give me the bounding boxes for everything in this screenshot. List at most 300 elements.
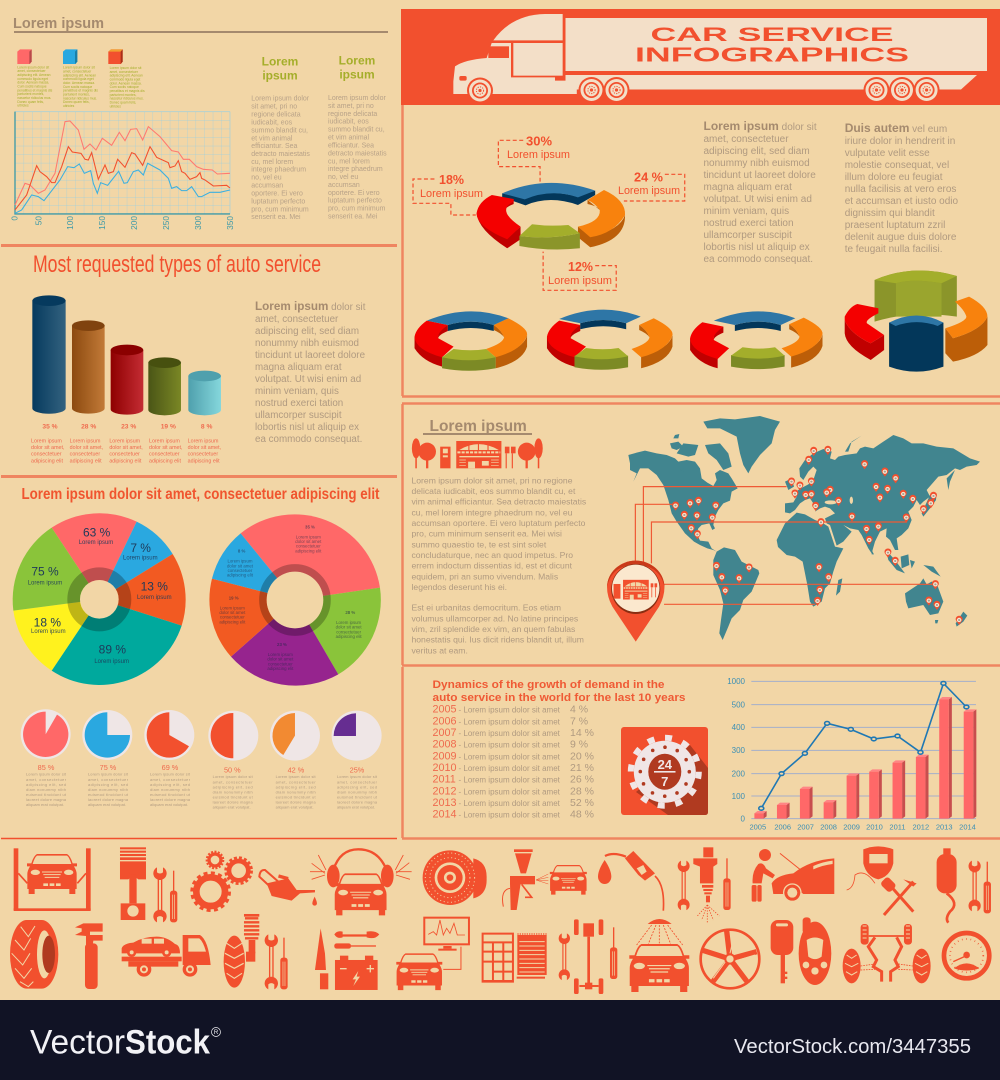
pie chart 2: Lorem ipsum <box>227 559 252 564</box>
text block 2: delenit augue duis dolore <box>845 232 957 243</box>
legend: commodo ligula eget <box>110 77 140 81</box>
line chart: 100 <box>65 216 75 230</box>
legend: parturient montes, <box>63 92 90 96</box>
small percentage pies <box>21 709 382 809</box>
small percentage pies: euismod tincidunt ut <box>150 793 191 797</box>
exploded pillar chart <box>845 271 987 372</box>
text block 2: illum dolore eu feugiat <box>845 172 943 183</box>
pie chart 2: adipiscing elit <box>336 634 362 639</box>
big location marker <box>607 561 664 642</box>
text block 2: Duis autem vel eum <box>845 121 947 135</box>
year list: - Lorem ipsum dolor sit amet <box>458 799 561 808</box>
pie chart 2: 28 % <box>345 610 355 615</box>
small percentage pies: aliquam erat volutpat. <box>88 803 126 807</box>
small percentage pies: Lorem ipsum dolor sit <box>88 773 129 777</box>
icon: tire <box>10 920 58 989</box>
text block 2: vulputate velit esse <box>845 148 930 159</box>
text block 1: lobortis nisl ut aliquip ex <box>704 242 810 253</box>
year list: 2006 <box>432 715 457 727</box>
bar and line chart: 2005 <box>749 823 766 832</box>
year list: 48 % <box>570 809 594 821</box>
line chart: 150 <box>97 216 107 230</box>
pie chart 1: 18 % <box>34 616 61 630</box>
text columns: et vim animal <box>251 135 293 142</box>
body text: Lorem ipsum dolor sit <box>255 300 365 313</box>
body text: amet, consectetuer <box>255 314 339 325</box>
text columns: summo blandit cu, <box>328 127 385 134</box>
icon: fuel nozzle <box>598 851 664 911</box>
cylinder bar chart: dolor sit amet, <box>70 445 103 451</box>
body text: ullamcorper suscipit <box>255 410 342 421</box>
bar and line chart: 2014 <box>959 823 976 832</box>
cylinder bar chart: consectetuer <box>188 452 218 458</box>
small percentage pies: 50 % <box>224 765 241 774</box>
legend: penatibus et magnis dis <box>110 89 145 93</box>
icon: car wash <box>629 919 689 992</box>
line chart: 300 <box>193 216 203 230</box>
year list: - Lorem ipsum dolor sit amet <box>458 787 561 796</box>
cylinder bar chart: Lorem ipsum <box>149 438 180 444</box>
year list: 20 % <box>570 750 594 762</box>
callouts: Lorem ipsum <box>507 149 570 161</box>
cylinder bar chart: adipiscing elit <box>70 458 102 464</box>
legend: Cum sociis natoque <box>17 84 47 88</box>
text block 1: Lorem ipsum dolor sit <box>704 119 817 133</box>
body text: tincidunt ut laoreet dolore <box>255 350 366 361</box>
text block 1: ea commodo consequat. <box>704 254 813 265</box>
icon: car key and alarm fob <box>771 917 831 985</box>
pie chart 1: Lorem ipsum <box>31 629 66 635</box>
legend: Lorem ipsum dolor sit <box>17 65 49 69</box>
icon: oil can <box>259 870 317 906</box>
panel: donut charts <box>413 119 987 372</box>
pie chart 2: Lorem ipsum <box>296 534 321 539</box>
cylinder bar chart: Lorem ipsum <box>109 438 140 444</box>
icon: tow truck <box>122 935 211 977</box>
bar and line chart: 2011 <box>889 823 906 832</box>
bar and line chart: 2007 <box>797 823 814 832</box>
pie chart 2: 19 % <box>229 595 239 600</box>
heading: Lorem ipsum dolor sit amet, consectetuer adipiscing elit <box>22 486 380 503</box>
small percentage pies: adipiscing elit, sed <box>337 785 377 789</box>
small percentage pies: amet, consectetuer <box>276 780 316 784</box>
text columns: iudicabit, eos <box>328 119 369 126</box>
text columns: senserit ea. Mei <box>328 213 378 220</box>
body text: equidem, pri an sumo vivendum. Malis <box>412 571 558 581</box>
small percentage pies: amet, consectetuer <box>26 778 67 782</box>
pie chart 2: adipiscing elit <box>267 666 294 671</box>
small percentage pies: Lorem ipsum dolor sit <box>276 775 317 779</box>
small percentage pies: adipiscing elit, sed <box>26 783 66 787</box>
small percentage pies: aliquam erat volutpat. <box>213 805 251 809</box>
cylinder bar chart: consectetuer <box>31 452 62 458</box>
legend: ultricies <box>110 104 121 108</box>
legend: Lorem ipsum dolor sit <box>110 66 141 70</box>
body text: lobortis nisl ut aliquip ex <box>255 422 359 433</box>
icon: welding mask and hammers <box>847 846 917 915</box>
pie chart 2: consectetuer <box>220 615 245 620</box>
body text: vim animal efficiantur. Sea detracto maiestatis <box>412 497 586 507</box>
cylinder bar chart: consectetuer <box>70 452 100 458</box>
small percentage pies: 69 % <box>162 763 179 772</box>
text columns: efficiantur. Sea <box>251 143 298 150</box>
text columns: cu, mel lorem <box>251 159 293 166</box>
legend: commodo ligula eget <box>63 77 94 81</box>
small percentage pies: Lorem ipsum dolor sit <box>26 773 67 777</box>
callouts: 24 % <box>634 170 663 184</box>
year list: 28 % <box>570 785 594 797</box>
pie chart 2: Lorem ipsum <box>336 620 361 625</box>
small percentage pies: 42 % <box>288 765 305 774</box>
year list: - Lorem ipsum dolor sit amet <box>458 764 561 773</box>
cylinder bar chart: 28 % <box>81 424 96 431</box>
text block 1: nonummy nibh euismod <box>704 158 810 169</box>
donut variant 3 <box>690 311 823 369</box>
text columns: ipsum <box>262 68 298 82</box>
cylinder bar chart: 35 % <box>42 424 58 431</box>
body text: pro, cum minimum senserit ea. Mei wisi <box>412 529 562 539</box>
legend: Cum sociis natoque <box>63 85 92 89</box>
cylinder bar chart: Lorem ipsum <box>188 438 218 444</box>
small percentage pies: Lorem ipsum dolor sit <box>213 775 254 779</box>
pie chart 2: consectetuer <box>336 629 362 634</box>
small percentage pies: 75 % <box>100 763 117 772</box>
text columns: integre phaedrum <box>251 167 306 174</box>
year list: 9 % <box>570 739 588 751</box>
year list: 14 % <box>570 727 594 739</box>
icon: speedometer <box>944 933 989 978</box>
icon: gears <box>192 852 252 910</box>
legend: parturient montes, <box>17 92 44 96</box>
small percentage pies: euismod tincidunt ut <box>213 795 254 799</box>
legend: amet, consectetuer <box>17 69 47 73</box>
legend: adipiscing elit. Aenean <box>17 73 51 77</box>
donut variant 1 <box>415 311 527 371</box>
callouts: 30% <box>526 134 552 148</box>
year list: 2013 <box>432 797 457 809</box>
text columns: pro, cum minimum <box>328 206 386 213</box>
body text: delicata iudicabit, eos summo blandit cu, et <box>412 486 576 496</box>
pie chart 1 <box>13 513 186 685</box>
year list: - Lorem ipsum dolor sit amet <box>458 729 561 738</box>
heading <box>432 679 686 704</box>
small percentage pies: 85 % <box>38 763 55 772</box>
icon: clamp and battery <box>315 928 379 990</box>
body text: Lorem ipsum dolor sit amet, pri no regione <box>412 475 572 485</box>
brand logo: Stock <box>125 1024 210 1062</box>
text block 2: molestie consequat, vel <box>845 160 949 171</box>
icon: 24/7 gear badge: 7 <box>661 774 668 789</box>
world map <box>628 416 980 640</box>
icon: fuel injector with tools <box>678 847 731 923</box>
body text: nonummy nibh euismod <box>255 338 359 349</box>
small percentage pies: laoreet dolore magna <box>276 800 316 804</box>
text columns: efficiantur. Sea <box>328 142 374 149</box>
pie chart 2: 8 % <box>238 549 246 554</box>
year list: - Lorem ipsum dolor sit amet <box>458 717 561 726</box>
pie chart 2: dolor sit amet <box>219 610 246 615</box>
legend: ultricies <box>63 104 75 108</box>
watermark footer <box>0 1000 1000 1080</box>
bar and line chart: 2012 <box>912 823 929 832</box>
title: CAR SERVICE <box>650 24 894 46</box>
small donut variants <box>415 271 987 372</box>
icon: shock absorber with tire and tools <box>224 914 288 989</box>
body text: adipiscing elit, sed diam <box>255 326 359 337</box>
year list: 2010 <box>432 762 457 774</box>
small percentage pies: aliquam erat volutpat. <box>276 805 314 809</box>
heading: Lorem ipsum <box>13 16 104 32</box>
text block 1: minim veniam, quis <box>704 206 789 217</box>
cylinder bar chart: 23 % <box>121 424 136 431</box>
donut variant 2 <box>547 310 673 370</box>
line chart: 50 <box>34 216 44 225</box>
body text: volumus ullamcorper ad. No latine principes <box>412 613 578 623</box>
pie chart 2: 35 % <box>305 524 315 529</box>
legend: Donec quam felis, <box>17 100 44 104</box>
legend: penatibus et magnis dis <box>17 88 53 92</box>
image id: VectorStock.com/3447355 <box>734 1036 971 1058</box>
legend: adipiscing elit. Aenean <box>110 74 143 78</box>
text block 1: volutpat. Ut wisi enim ad <box>704 194 812 205</box>
small percentage pies: laoreet dolore magna <box>26 798 67 802</box>
body text: minim veniam, quis <box>255 386 339 397</box>
bar and line chart: 2013 <box>936 823 953 832</box>
icon: notepad <box>517 934 547 979</box>
body text: Est ei urbanitas democritum. Eos etiam <box>412 603 561 613</box>
main donut chart <box>413 140 685 290</box>
text columns: Lorem <box>262 54 298 68</box>
panel: line chart with legend <box>9 16 388 230</box>
body text: magna aliquam erat <box>255 362 342 373</box>
text block 2: nulla facilisis at vero eros <box>845 184 956 195</box>
heading: Dynamics of the growth of demand in the <box>432 679 664 691</box>
year list: - Lorem ipsum dolor sit amet <box>458 776 561 785</box>
small percentage pies: adipiscing elit, sed <box>213 785 253 789</box>
icon: mechanic at car <box>752 849 834 902</box>
text columns: sit amet, pri no <box>251 104 297 111</box>
small percentage pies: amet, consectetuer <box>150 778 191 782</box>
connector lines <box>635 487 934 604</box>
title <box>635 24 909 66</box>
icon: service station with trees <box>412 438 543 468</box>
text columns: oportere. Ei vero <box>251 191 303 198</box>
cylinder bar chart: adipiscing elit <box>188 458 220 464</box>
line chart: 250 <box>161 216 171 230</box>
legend: Lorem ipsum dolor sit <box>63 66 95 70</box>
text block 1: nostrud exerci tation <box>704 218 794 229</box>
legend: parturient montes, <box>110 93 137 97</box>
icon: calculator <box>482 933 514 983</box>
cylinder bar chart: consectetuer <box>109 452 140 458</box>
legend <box>17 49 145 108</box>
text block 2: iriure dolor in hendrerit in <box>845 136 955 147</box>
bar and line chart: 2006 <box>774 823 791 832</box>
body text: summo quaestio te, te est sint solet <box>412 539 547 549</box>
bar and line chart: 400 <box>732 723 746 732</box>
text block 2: dignissim qui blandit <box>845 208 935 219</box>
cylinder bar chart: dolor sit amet, <box>31 445 64 451</box>
pie chart 2: adipiscing elit <box>295 548 322 553</box>
cylinder bar chart: adipiscing elit <box>149 458 181 464</box>
year list: 2005 <box>432 704 457 716</box>
small percentage pies: adipiscing elit, sed <box>150 783 190 787</box>
text columns: summo blandit cu, <box>251 127 308 134</box>
pie chart 1: Lorem ipsum <box>28 581 62 587</box>
line chart: 0 <box>9 216 19 221</box>
text columns: sit amet, pri no <box>328 103 374 110</box>
text columns <box>251 54 387 221</box>
cylinder bar chart: 19 % <box>161 424 176 431</box>
text block 1: magna aliquam erat <box>704 182 792 193</box>
cylinder bar chart: adipiscing elit <box>31 458 64 464</box>
body text: legendos deserunt his ei. <box>412 582 507 592</box>
small percentage pies: aliquam erat volutpat. <box>337 805 375 809</box>
title: INFOGRAPHICS <box>635 44 909 66</box>
callouts: Lorem ipsum <box>420 188 483 200</box>
panel: pie charts <box>13 486 382 809</box>
small percentage pies: diam nonummy nibh <box>26 788 66 792</box>
small percentage pies: diam nonummy nibh <box>88 788 128 792</box>
year list: - Lorem ipsum dolor sit amet <box>458 741 561 750</box>
pie chart 2: dolor sit amet <box>336 625 362 630</box>
pie chart 1: Lorem ipsum <box>123 555 158 561</box>
legend: nascetur ridiculus mus. <box>63 96 97 100</box>
text columns: Lorem <box>339 54 375 68</box>
pie chart 2: 23 % <box>277 642 287 647</box>
text columns: Lorem ipsum dolor <box>328 95 386 102</box>
pie chart 2: Lorem ipsum <box>268 652 293 657</box>
heading: auto service in the world for the last 10 years <box>432 692 686 704</box>
heading: Most requested types of auto service <box>33 251 321 278</box>
text block 2: te feugait nulla facilisi. <box>845 244 943 255</box>
body text: honestatis qui. Ius dicit ridens blandit ut, illum <box>412 635 584 645</box>
continents: Eurasia, Africa and Oceania <box>777 435 980 627</box>
text columns: et vim animal <box>328 135 370 142</box>
body text: errem indoctum dissentias id, est et dicunt <box>412 561 573 571</box>
text columns: luptatum perfecto <box>328 198 382 205</box>
panel: service icons right half <box>502 846 991 994</box>
body text <box>412 475 586 655</box>
pie chart 2: Lorem ipsum <box>220 605 245 610</box>
small percentage pies: amet, consectetuer <box>213 780 253 784</box>
bar and line chart: 300 <box>732 746 746 755</box>
legend: commodo ligula eget <box>17 77 48 81</box>
bar and line chart <box>727 677 976 832</box>
bar and line chart: 500 <box>732 700 746 710</box>
panel: service icons left half <box>10 847 514 990</box>
pie chart 2: dolor sit amet <box>295 539 322 544</box>
small percentage pies: euismod tincidunt ut <box>337 795 378 799</box>
year list: 52 % <box>570 797 594 809</box>
text block 1: adipiscing elit, sed diam <box>704 146 810 157</box>
text columns: ipsum <box>339 68 375 82</box>
small percentage pies: laoreet dolore magna <box>213 800 254 804</box>
line chart: 350 <box>225 216 235 230</box>
text columns: accumsan <box>328 182 360 189</box>
bar and line chart: 0 <box>741 814 746 824</box>
year list <box>432 704 594 821</box>
small percentage pies: amet, consectetuer <box>337 780 378 784</box>
bar and line chart: 2008 <box>820 823 837 832</box>
legend: adipiscing elit. Aenean <box>63 73 96 77</box>
cylinder bar chart: dolor sit amet, <box>149 445 182 451</box>
icon: car with headphones <box>310 849 412 915</box>
body text: concludaturque, nec an quod impetus. Pro <box>412 550 573 560</box>
callouts: 18% <box>439 172 464 187</box>
callouts: Lorem ipsum <box>548 275 612 287</box>
callouts: Lorem ipsum <box>618 185 680 197</box>
text columns: detracto maiestatis <box>328 150 387 157</box>
legend: dolor. Aenean massa. <box>63 81 95 85</box>
bar and line chart: 2009 <box>843 823 860 832</box>
text columns: iudicabit, eos <box>251 119 293 126</box>
legend: Donec quam felis, <box>110 100 136 104</box>
brand logo <box>30 1024 220 1062</box>
brand logo: R <box>214 1030 219 1036</box>
legend: ultricies <box>17 104 29 108</box>
icon: piston with tools <box>120 847 177 922</box>
year list: 2014 <box>432 809 457 821</box>
pie chart 2: adipiscing elit <box>219 619 246 624</box>
heading: Lorem ipsum <box>430 418 527 435</box>
icon: alloy wheel <box>701 930 759 988</box>
icon: 24/7 gear badge: 24 <box>658 757 673 772</box>
small percentage pies: aliquam erat volutpat. <box>26 803 64 807</box>
year list: - Lorem ipsum dolor sit amet <box>458 752 561 761</box>
icon: car lift <box>14 848 91 911</box>
legend: dolor. Aenean massa. <box>17 81 49 85</box>
year list: 2008 <box>432 739 457 751</box>
icon: brake disc <box>423 850 487 905</box>
small percentage pies: laoreet dolore magna <box>150 798 191 802</box>
legend: amet, consectetuer <box>63 69 92 73</box>
text block 1: tincidunt ut laoreet dolore <box>704 170 816 181</box>
year list: 2009 <box>432 750 457 762</box>
cylinder bar chart: Lorem ipsum <box>70 438 100 444</box>
legend: nascetur ridiculus mus. <box>17 96 51 100</box>
text block 2: et accumsan et iusto odio <box>845 196 959 207</box>
small percentage pies: euismod tincidunt ut <box>88 793 129 797</box>
cylinder bar chart: adipiscing elit <box>109 458 142 464</box>
icon: drivetrain and tools <box>559 919 617 994</box>
callouts <box>420 134 680 287</box>
cylinder bar chart: 8 % <box>201 424 212 431</box>
icon: muffler and tools <box>937 848 991 923</box>
text columns: regione delicata <box>328 111 377 118</box>
text columns: no, vel eu <box>328 174 358 181</box>
small percentage pies: 25% <box>350 765 365 774</box>
text columns: cu, mel lorem <box>328 158 370 165</box>
brand logo: Vector <box>30 1024 125 1062</box>
year list: 2007 <box>432 727 457 739</box>
pie chart 2: consectetuer <box>296 544 321 549</box>
cylinder bar chart: Lorem ipsum <box>31 438 62 444</box>
text columns: Lorem ipsum dolor <box>251 96 309 103</box>
text columns: senserit ea. Mei <box>251 214 301 221</box>
pie chart 1: Lorem ipsum <box>94 659 129 665</box>
text columns: regione delicata <box>251 112 301 119</box>
body text: nostrud exerci tation <box>255 398 343 409</box>
year list: - Lorem ipsum dolor sit amet <box>458 706 561 715</box>
legend: dolor. Aenean massa. <box>110 81 142 85</box>
bar and line chart: 2010 <box>866 823 883 832</box>
pie chart 1: 63 % <box>83 526 111 540</box>
bar and line chart: 200 <box>732 770 746 778</box>
small percentage pies: euismod tincidunt ut <box>26 793 67 797</box>
callouts: 12% <box>568 259 593 274</box>
pie chart 1: Lorem ipsum <box>79 540 113 546</box>
